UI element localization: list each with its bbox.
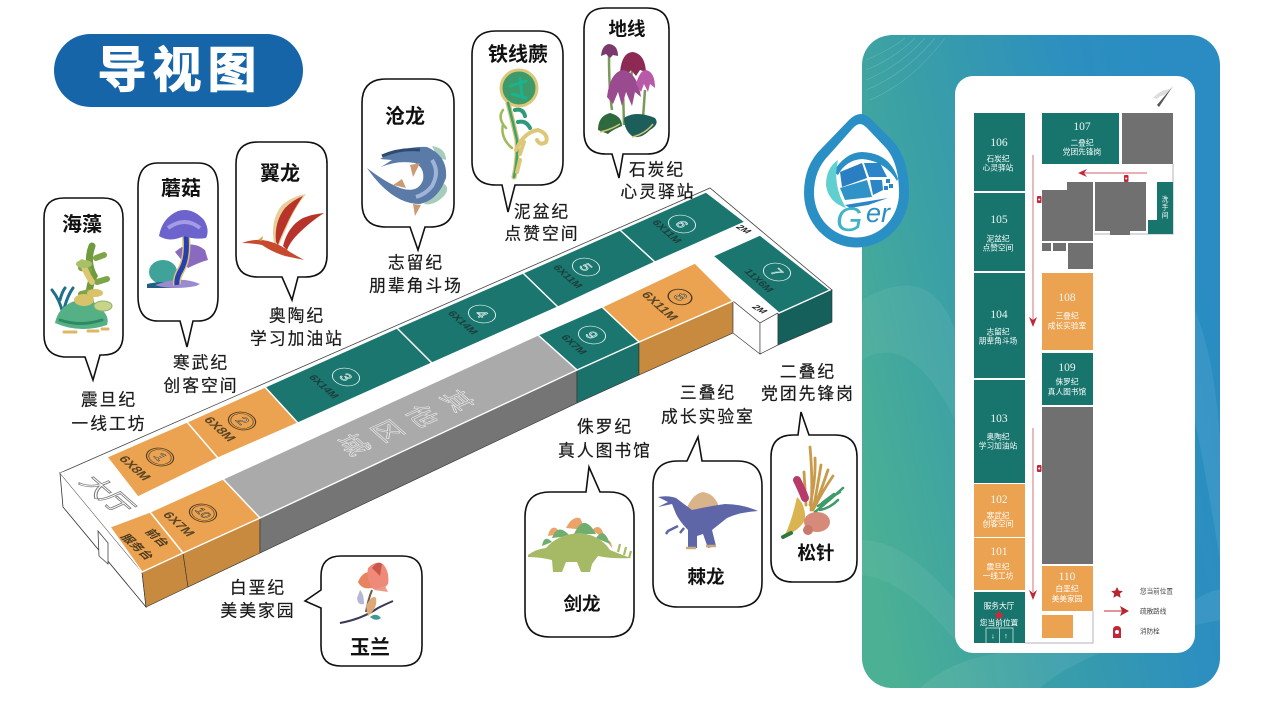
label: Jurassic: 侏罗纪 [577, 418, 633, 436]
washroom: 间 [1162, 212, 1169, 220]
room 107: 二叠纪 [1070, 138, 1094, 148]
room 106: 石炭纪 [986, 154, 1010, 164]
top row: stalls 1 to 6 [107, 192, 745, 497]
icon: hydrant 3 [1037, 465, 1042, 472]
stall 5 labels: 5 [576, 261, 596, 273]
callout: spinosaurus: 棘龙 [687, 566, 725, 588]
hall label: 大 [73, 472, 121, 502]
callout: spinosaurus [653, 437, 762, 607]
stall 9 labels: 6X7M [558, 334, 588, 356]
stall 1 labels: 1 [149, 451, 171, 463]
callout: seaweed: 海藻 [62, 213, 102, 236]
room 105 [974, 193, 1025, 271]
room 109: 真人图书馆 [1048, 386, 1087, 396]
stall 5 labels [550, 255, 605, 290]
label: Triassic [661, 384, 755, 426]
room 102 [974, 484, 1025, 537]
other areas label: 其 [434, 386, 480, 416]
room 110: 110 [1059, 571, 1076, 583]
arrow: vertical route lower [1029, 428, 1037, 600]
other areas label [330, 386, 480, 460]
label: Silurian [369, 254, 463, 296]
label: Cretaceous: 白垩纪 [230, 578, 286, 598]
label: Permian [761, 362, 855, 404]
label: Cretaceous [220, 578, 296, 620]
small orange room [1042, 615, 1073, 638]
stall 6 labels: 6X11M [649, 219, 683, 245]
reception labels [117, 527, 173, 562]
icon: pterosaur [242, 194, 324, 260]
label: Triassic: 三叠纪 [680, 384, 736, 402]
title pill: 导视图 [97, 44, 263, 98]
white base floor [60, 188, 832, 572]
reception labels: 前台 [142, 527, 173, 549]
corridor width labels: 2M [749, 303, 771, 315]
stall 2 labels: 2 [231, 415, 253, 427]
callout: magnolia [305, 556, 422, 666]
room 102: 创客空间 [983, 518, 1014, 528]
room 104: 朋辈角斗场 [979, 336, 1018, 346]
reception labels: 服务台 [117, 532, 158, 562]
room 103: 103 [990, 413, 1008, 425]
gray service rooms [1042, 113, 1173, 564]
stall 3 labels [306, 365, 365, 400]
label: Carboniferous: 石炭纪 [629, 160, 685, 180]
callout: horsetail [584, 8, 669, 178]
service hall: ↑ [1004, 632, 1008, 640]
stall 1 labels: 6X8M [115, 454, 155, 482]
label: Jurassic: 真人图书馆 [558, 442, 652, 460]
panel: white plan card [955, 76, 1195, 653]
label: Devonian: 点赞空间 [504, 224, 580, 244]
callout: mosasaur: 沧龙 [385, 104, 425, 128]
stall 9 labels: 9 [582, 329, 602, 341]
legend: evacuation route: 疏散路线 [1140, 606, 1167, 616]
room 104 [974, 273, 1025, 378]
callout: stegosaurus [525, 467, 634, 637]
callout: pterosaur [236, 142, 327, 300]
stall 9 labels [558, 323, 611, 356]
room 109: 109 [1058, 362, 1076, 374]
room 103 [974, 380, 1025, 483]
logo wordmark: er [866, 198, 891, 228]
label: Devonian [504, 202, 580, 244]
stall 7 labels [741, 260, 796, 294]
corridor width labels [733, 223, 771, 315]
icon: seaweed [52, 246, 112, 332]
stall 10 labels: 6X7M [159, 510, 199, 538]
icon: stegosaurus [528, 518, 631, 572]
label: Jurassic [558, 418, 652, 460]
stall 6 labels: 6 [672, 218, 692, 230]
room 110: 美美家园 [1052, 594, 1083, 604]
legend: hydrant: 消防栓 [1140, 626, 1160, 636]
label: Ediacaran [71, 390, 147, 434]
stall 10 labels [159, 501, 222, 538]
label: Ordovician: 奥陶纪 [269, 306, 325, 326]
callout: mosasaur [362, 79, 454, 250]
room 101: 一线工坊 [983, 570, 1014, 580]
washroom [1148, 182, 1173, 234]
room 105: 泥盆纪 [986, 234, 1010, 244]
callout: pterosaur: 翼龙 [260, 162, 300, 185]
stall 1 labels [115, 445, 179, 482]
washroom: 手 [1162, 202, 1169, 212]
other areas label: 区 [364, 416, 410, 446]
icon: pine needles [783, 447, 843, 537]
label: Silurian: 志留纪 [388, 254, 444, 272]
room 110: 白垩纪 [1055, 584, 1079, 594]
stall 4 labels: 4 [472, 308, 492, 320]
label: Ordovician [250, 306, 344, 348]
label: Carboniferous [620, 160, 696, 202]
callout: stegosaurus: 剑龙 [563, 594, 601, 614]
callout: pine needles: 松针 [797, 542, 835, 564]
label: Permian: 党团先锋岗 [761, 384, 855, 404]
arrow: vertical route upper [1029, 155, 1037, 327]
room 106: 心灵驿站 [983, 162, 1014, 172]
bottom row: stalls 7 to 10 and reception [110, 235, 830, 572]
stall 6 labels [649, 212, 701, 245]
label: Cambrian: 创客空间 [163, 376, 239, 396]
room 104: 志留纪 [986, 326, 1010, 336]
stall 2 labels [200, 409, 261, 443]
room 103: 奥陶纪 [986, 432, 1010, 442]
callout: mushroom [138, 163, 218, 347]
arrow: top route [1078, 169, 1147, 177]
room 102: 寒武纪 [986, 510, 1010, 520]
room 107: 党团先锋岗 [1063, 146, 1101, 156]
label: Carboniferous: 心灵驿站 [620, 182, 696, 202]
label: Ediacaran: 震旦纪 [81, 390, 137, 410]
stall 4 labels [445, 302, 501, 336]
other areas label: 域 [330, 430, 376, 460]
stall 4 labels: 6X14M [445, 310, 480, 336]
room 105: 105 [990, 214, 1008, 226]
label: Ediacaran: 一线工坊 [71, 414, 147, 434]
room 107: 107 [1073, 121, 1091, 133]
icon: mosasaur [367, 146, 447, 216]
callout: pine needles [771, 412, 857, 582]
hall label [73, 472, 141, 518]
label: Cambrian [163, 354, 239, 396]
callout: fern [472, 31, 563, 212]
stall 10 labels: 10 [192, 506, 215, 520]
plan outlines [1025, 164, 1173, 643]
icon: spinosaurus [658, 492, 758, 549]
label: Triassic: 成长实验室 [661, 408, 755, 426]
room 103: 学习加油站 [979, 440, 1018, 450]
callout: horsetail: 地线 [608, 18, 646, 40]
stall 3 labels: 6X14M [306, 374, 341, 400]
callout: fern: 铁线蕨 [488, 43, 548, 66]
stall 7 labels: 7 [767, 266, 787, 278]
room 101: 震旦纪 [986, 562, 1010, 572]
callout: seaweed [44, 198, 123, 380]
icon: fern [501, 70, 547, 177]
stall 3 labels: 3 [336, 371, 356, 383]
room 110 [1042, 566, 1093, 611]
legend [1104, 586, 1173, 638]
room 106 [974, 113, 1025, 191]
icon: purple flowers [598, 44, 657, 137]
stall 2 labels: 6X8M [200, 415, 240, 443]
room 101: 101 [990, 546, 1008, 558]
room 107 [1042, 113, 1119, 164]
service hall [974, 592, 1025, 643]
icon: hydrant 1 [1124, 175, 1128, 182]
room 109 [1042, 353, 1093, 405]
stall 8 labels [638, 286, 697, 322]
room 108: 三叠纪 [1055, 310, 1079, 320]
stall 8 labels: 6X11M [638, 290, 682, 322]
label: Permian: 二叠纪 [780, 362, 836, 382]
icon: magnolia [340, 563, 393, 623]
front door [98, 531, 108, 564]
room 108: 108 [1058, 292, 1076, 304]
callout: magnolia: 玉兰 [350, 636, 390, 659]
corridor and base fill [60, 250, 733, 572]
callout: mushroom: 蘑菇 [161, 177, 201, 200]
icon: hydrant 2 [1037, 196, 1042, 203]
other areas label: 他 [399, 401, 445, 431]
label: Cambrian: 寒武纪 [173, 354, 229, 372]
left white wall [60, 473, 146, 607]
isometric floor model [60, 188, 832, 607]
icon: mushroom [147, 210, 208, 288]
room 106: 106 [990, 137, 1008, 149]
stall 8 labels: 8 [669, 291, 691, 303]
room 104: 104 [990, 309, 1008, 321]
stall 5 labels: 6X11M [550, 264, 584, 290]
icon: compass [1153, 86, 1173, 107]
service hall: 您当前位置 [980, 618, 1019, 628]
label: Ordovician: 学习加油站 [250, 330, 344, 348]
front faces of right blocks [142, 290, 832, 607]
label: Cretaceous: 美美家园 [220, 602, 296, 620]
label: Devonian: 泥盆纪 [514, 202, 570, 222]
service hall: 服务大厅 [984, 600, 1015, 610]
legend: current position: 您当前位置 [1140, 586, 1173, 596]
stall 7 labels: 11X6M [741, 268, 775, 294]
room 108: 成长实验室 [1048, 320, 1087, 330]
room 101 [974, 538, 1025, 590]
title pill [54, 34, 303, 107]
logo wordmark: G [836, 201, 862, 239]
corridor width labels: 2M [733, 223, 755, 235]
logo wordmark [836, 198, 891, 239]
room 102: 102 [990, 494, 1008, 506]
panel: floor plan background [862, 35, 1220, 688]
room 109: 侏罗纪 [1055, 376, 1079, 386]
icon: globe grid [826, 152, 898, 208]
room 108 [1042, 273, 1093, 350]
room 105: 点赞空间 [983, 242, 1014, 252]
logo: water drop badge [804, 114, 909, 248]
label: Silurian: 朋辈角斗场 [369, 276, 463, 296]
service hall: ↓ [991, 632, 995, 640]
hall label: 厅 [93, 488, 141, 518]
washroom: 洗 [1162, 194, 1169, 204]
